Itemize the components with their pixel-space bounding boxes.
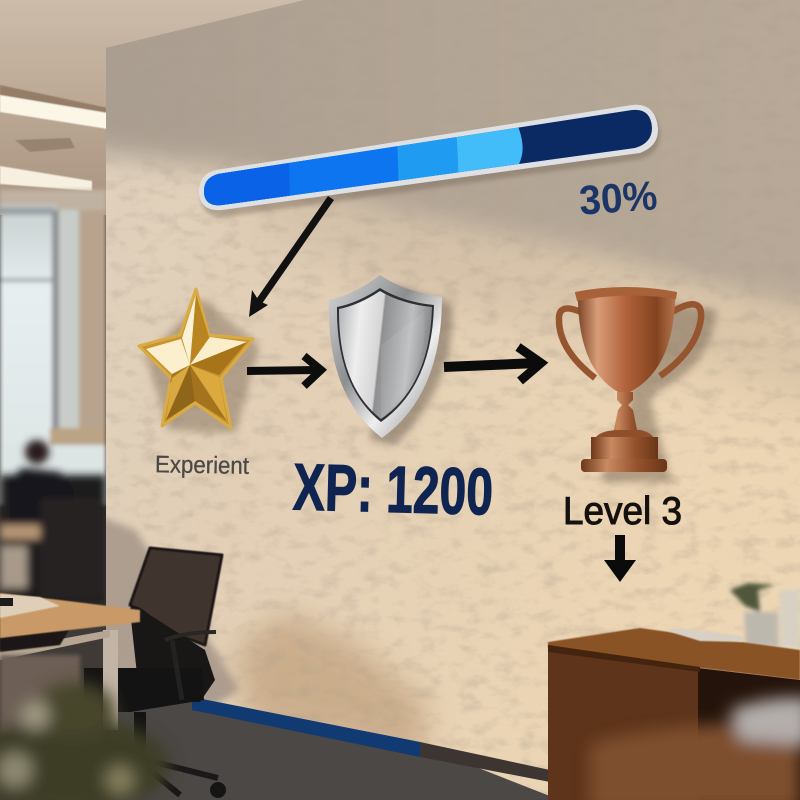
- plant and vase: [730, 583, 800, 648]
- arrow: star to shield: [247, 356, 321, 386]
- blurred foreground desk: [590, 698, 800, 800]
- baseboard: [192, 697, 550, 782]
- wall soft penumbra: [272, 204, 800, 408]
- arrow: shield to trophy: [444, 347, 541, 381]
- wall shadow band: [60, 0, 800, 325]
- desk top: [548, 628, 800, 680]
- floor: [106, 690, 560, 800]
- lower wall shadows: [106, 514, 240, 704]
- desk front: [548, 645, 698, 800]
- blurred foreground plant: [0, 682, 170, 800]
- trophy handles: [559, 304, 701, 378]
- arrow: down from level: [604, 535, 636, 582]
- bar filled segments: [204, 128, 523, 206]
- label: 30%: 30%: [578, 172, 659, 224]
- label: XP 1200: XP: 1200: [292, 449, 494, 529]
- ceiling lights: [0, 85, 108, 191]
- near desk: [0, 593, 140, 735]
- office chair: [84, 548, 226, 798]
- progress bar: [199, 104, 661, 219]
- icon: gold star: [139, 289, 259, 433]
- right desk and decor: [548, 583, 800, 800]
- ceiling: [0, 0, 305, 215]
- icon: silver shield: [329, 275, 452, 445]
- label: Experient: Experient: [155, 451, 250, 480]
- arrow: bar to star: [249, 196, 334, 317]
- label: Level 3: Level 3: [563, 490, 682, 533]
- window and column: [0, 190, 106, 505]
- icon: bronze trophy: [559, 287, 716, 482]
- distant worker and desks: [0, 440, 106, 605]
